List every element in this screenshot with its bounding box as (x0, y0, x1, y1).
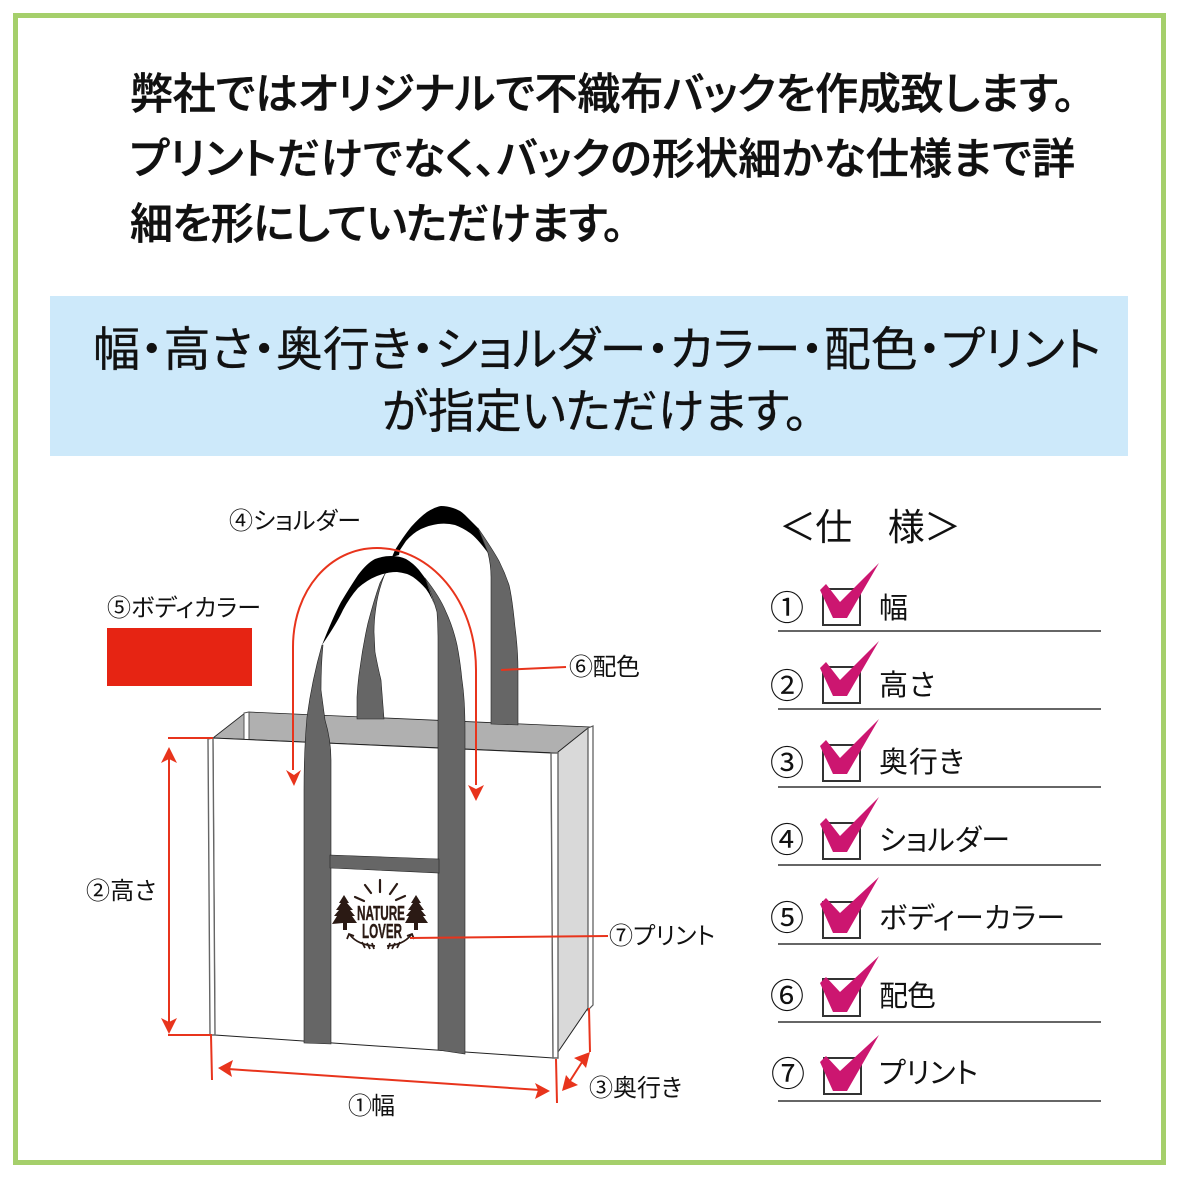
specification heading: ＜仕 様＞ (779, 507, 961, 548)
blue banner: customizable items: が指定いただけます。 (382, 385, 808, 438)
label: height: ②高さ (86, 878, 156, 905)
label: shoulder: ④ショルダー (229, 508, 361, 535)
logo words: NATURE (357, 903, 405, 925)
shoulder dimension arrow (286, 548, 484, 801)
logo left tree (332, 895, 357, 930)
spec row 6: color scheme (770, 956, 1101, 1022)
logo rays (355, 880, 405, 901)
spec row 7: print: ⑦ (771, 1056, 805, 1094)
back handle (357, 506, 518, 725)
spec row 4: shoulder: ショルダー (879, 824, 1010, 857)
label: color scheme: ⑥配色 (569, 654, 640, 681)
intro text block: 弊社ではオリジナルで不織布バックを作成致します。 (130, 71, 1075, 119)
logo right tree (405, 895, 428, 930)
spec row 7: print (771, 1035, 1101, 1101)
leader line: color scheme (501, 667, 566, 670)
spec row 2: height: ② (770, 668, 804, 706)
blue banner: customizable items: 幅・高さ・奥行き・ショルダー・カラー・配色・プリント (93, 323, 1101, 376)
logo words (357, 903, 405, 943)
logo arrows (347, 934, 414, 949)
spec row 2: height (770, 641, 1101, 709)
depth dimension (562, 1008, 590, 1091)
blue banner: customizable items (50, 296, 1128, 456)
spec row 1: width: 幅 (879, 592, 908, 625)
width dimension (211, 1035, 557, 1103)
print logo: NATURE LOVER (332, 880, 428, 949)
left gusset fold (244, 712, 249, 740)
spec row 5: body color: ⑤ (770, 900, 804, 938)
handle cross bar (330, 855, 439, 873)
spec row 1: width: ① (770, 590, 804, 628)
height dimension (161, 738, 213, 1035)
spec row 3: depth: 奥行き (879, 746, 964, 779)
intro text block: プリントだけでなく、バックの形状細かな仕様まで詳 (130, 136, 1075, 184)
spec row 6: color scheme: ⑥ (770, 978, 804, 1016)
spec row 5: body color: ボディーカラー (879, 902, 1065, 935)
spec row 3: depth (770, 719, 1101, 787)
label: width: ①幅 (348, 1093, 395, 1120)
label: print: ⑦プリント (609, 923, 715, 950)
right side gusset (558, 728, 588, 1052)
spec row 3: depth: ③ (770, 745, 804, 783)
label: depth: ③奥行き (589, 1075, 682, 1102)
logo words: LOVER (362, 921, 402, 943)
spec row 1: width (770, 563, 1101, 631)
intro text block (130, 71, 1075, 249)
bag front panel (213, 738, 553, 1058)
right edge strip (551, 753, 558, 1058)
bag illustration (208, 506, 593, 1058)
spec row 2: height: 高さ (879, 669, 935, 702)
spec row 4: shoulder (770, 797, 1101, 865)
intro text block: 細を形にしていただけます。 (130, 201, 624, 249)
leader line: print (410, 936, 608, 938)
right gusset strip (588, 726, 593, 1010)
spec row 6: color scheme: 配色 (879, 980, 936, 1013)
spec row 7: print: プリント (879, 1058, 978, 1090)
body color swatch (107, 628, 252, 686)
front handle (304, 556, 465, 1054)
label: body color: ⑤ボディカラー (107, 595, 261, 622)
spec row 4: shoulder: ④ (770, 822, 804, 860)
spec row 5: body color (770, 877, 1101, 944)
bag interior back panel (213, 712, 590, 753)
left edge strip (208, 738, 215, 1035)
